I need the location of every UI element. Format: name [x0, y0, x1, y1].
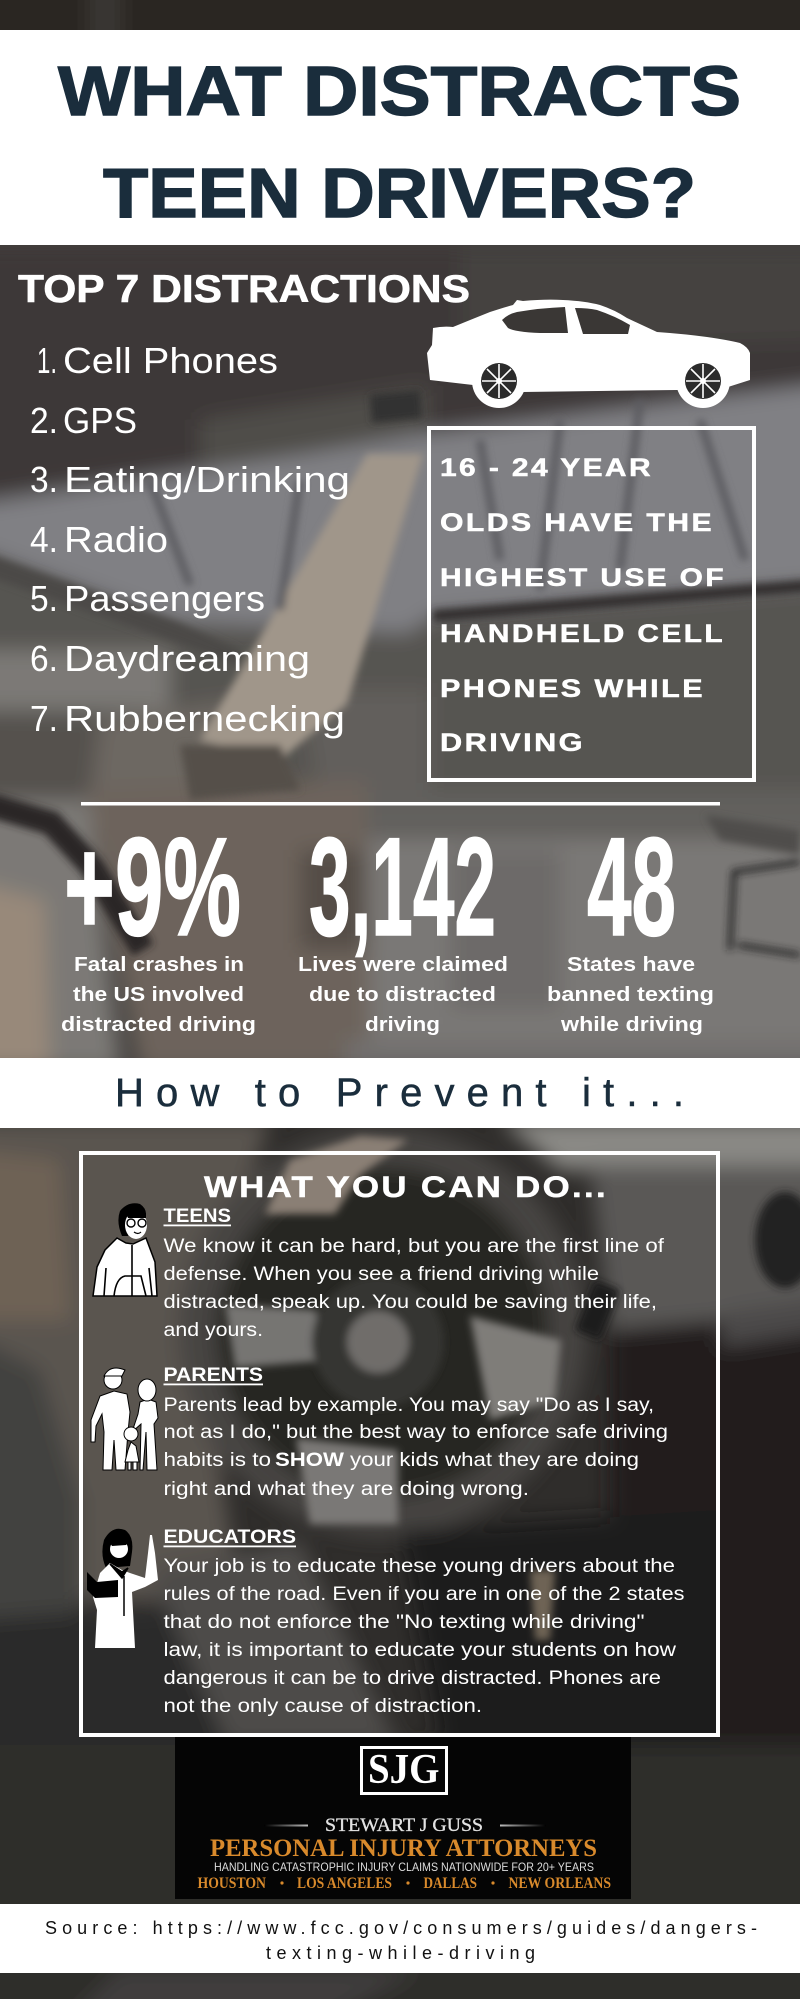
logo: Stewart J Guss: PERSONAL INJURY ATTORNEYS — [210, 1835, 597, 1862]
stat: +9%: Fatal crashes in — [74, 953, 244, 976]
stat: 3,142: Lives were claimed — [298, 953, 508, 976]
callout: 16-24 year olds: HIGHEST USE OF — [440, 564, 726, 592]
text block: educators — [164, 1556, 684, 1717]
band: source: texting-while-driving — [266, 1943, 535, 1963]
title — [58, 52, 741, 232]
stat: 48 — [547, 808, 714, 1036]
list: seven distractions: Cell Phones — [63, 340, 278, 381]
title: WHAT DISTRACTS — [58, 52, 741, 130]
heading: educators: EDUCATORS — [164, 1527, 296, 1548]
stat: +9%: +9% — [64, 808, 241, 965]
list: seven distractions: Passengers — [64, 578, 265, 619]
list: seven distractions: 6. — [30, 638, 58, 679]
stat: +9% — [61, 808, 256, 1036]
list: seven distractions: Radio — [64, 519, 168, 560]
band: how to prevent it: How to Prevent it... — [115, 1071, 684, 1115]
stat: 3,142: driving — [365, 1013, 440, 1036]
stat: 48: States have — [567, 953, 695, 976]
logo mark: SJG: SJG — [368, 1747, 440, 1793]
callout: 16-24 year olds — [429, 428, 754, 780]
text block: parents: right and what they are doing wrong. — [164, 1479, 529, 1500]
stat: +9%: distracted driving — [61, 1013, 256, 1036]
heading: teens: TEENS — [164, 1206, 231, 1227]
text block: educators: dangerous it can be to drive distracted. Phones are — [164, 1668, 661, 1689]
icon: educator — [87, 1529, 158, 1648]
text block: parents: your kids what they are doing — [350, 1450, 639, 1471]
logo: Stewart J Guss: LOS ANGELES — [297, 1875, 392, 1892]
stat: 48: while driving — [560, 1013, 703, 1036]
stat: 3,142 — [298, 808, 508, 1036]
heading: what you can do: WHAT YOU CAN DO... — [204, 1171, 608, 1204]
top white title band — [0, 30, 800, 245]
text block: teens: and yours. — [164, 1320, 263, 1341]
list: seven distractions: Daydreaming — [64, 638, 310, 679]
list: seven distractions — [30, 340, 350, 739]
list: seven distractions: GPS — [63, 400, 137, 441]
title: TEEN DRIVERS? — [103, 154, 696, 232]
logo: Stewart J Guss: HOUSTON — [198, 1875, 266, 1892]
callout: 16-24 year olds: HANDHELD CELL — [440, 620, 725, 648]
text block: educators: Your job is to educate these young drivers about the — [164, 1556, 675, 1577]
logo: Stewart J Guss: DALLAS — [424, 1875, 477, 1892]
stat: 48: banned texting — [547, 983, 714, 1006]
icon: parents — [91, 1368, 158, 1470]
stat: +9%: the US involved — [73, 983, 244, 1006]
background photo: steering wheel — [0, 1120, 800, 1999]
list: seven distractions: 3. — [30, 459, 58, 500]
stat: 3,142: due to distracted — [309, 983, 496, 1006]
logo: Stewart J Guss: STEWART J GUSS — [325, 1815, 483, 1836]
text block: teens: defense. When you see a friend driving while — [164, 1264, 599, 1285]
stat: 48: 48 — [587, 808, 676, 965]
panel: what you can do — [81, 1153, 718, 1735]
list: seven distractions: 4. — [30, 519, 58, 560]
list: seven distractions: Eating/Drinking — [64, 459, 350, 500]
text block: parents — [164, 1395, 668, 1500]
heading: top 7 distractions: TOP 7 DISTRACTIONS — [18, 268, 470, 311]
band: source: Source: https://www.fcc.gov/consumers/guides/dangers- — [45, 1918, 757, 1938]
list: seven distractions: 5. — [30, 578, 58, 619]
background photo: passenger raising arm in car — [0, 0, 800, 1130]
text block: educators: law, it is important to educate your students on how — [164, 1640, 676, 1661]
icon: car — [427, 300, 750, 408]
text block: parents: SHOW — [275, 1450, 344, 1471]
callout: 16-24 year olds: PHONES WHILE — [440, 675, 705, 703]
text block: teens — [164, 1236, 665, 1341]
list: seven distractions: 2. — [30, 400, 58, 441]
text block: educators: that do not enforce the "No texting while driving" — [164, 1612, 644, 1633]
heading: parents: PARENTS — [164, 1365, 263, 1386]
logo: Stewart J Guss: NEW ORLEANS — [508, 1875, 611, 1892]
callout: 16-24 year olds: OLDS HAVE THE — [440, 509, 714, 537]
text block: educators: not the only cause of distraction. — [164, 1696, 482, 1717]
band: source — [0, 1904, 800, 1973]
logo: Stewart J Guss — [175, 1737, 631, 1899]
icon: teen — [93, 1203, 157, 1296]
callout: 16-24 year olds: 16 - 24 YEAR — [440, 454, 653, 482]
text block: teens: distracted, speak up. You could be saving their life, — [164, 1292, 657, 1313]
callout: 16-24 year olds: DRIVING — [440, 729, 585, 757]
stat: 3,142: 3,142 — [309, 808, 496, 965]
band: how to prevent it — [0, 1058, 800, 1128]
list: seven distractions: 1. — [37, 340, 57, 381]
text block: parents: Parents lead by example. You may say "Do as I say, — [164, 1395, 654, 1416]
list: seven distractions: 7. — [30, 698, 58, 739]
text block: teens: We know it can be hard, but you are the first line of — [164, 1236, 665, 1257]
text block: educators: rules of the road. Even if you are in one of the 2 states — [164, 1584, 684, 1605]
text block: parents: habits is to — [164, 1450, 271, 1471]
list: seven distractions: Rubbernecking — [64, 698, 345, 739]
logo: Stewart J Guss: HANDLING CATASTROPHIC INJURY CLAIMS NATIONWIDE FOR 20+ YEARS — [214, 1860, 594, 1874]
text block: parents: not as I do," but the best way to enforce safe driving — [164, 1422, 668, 1443]
